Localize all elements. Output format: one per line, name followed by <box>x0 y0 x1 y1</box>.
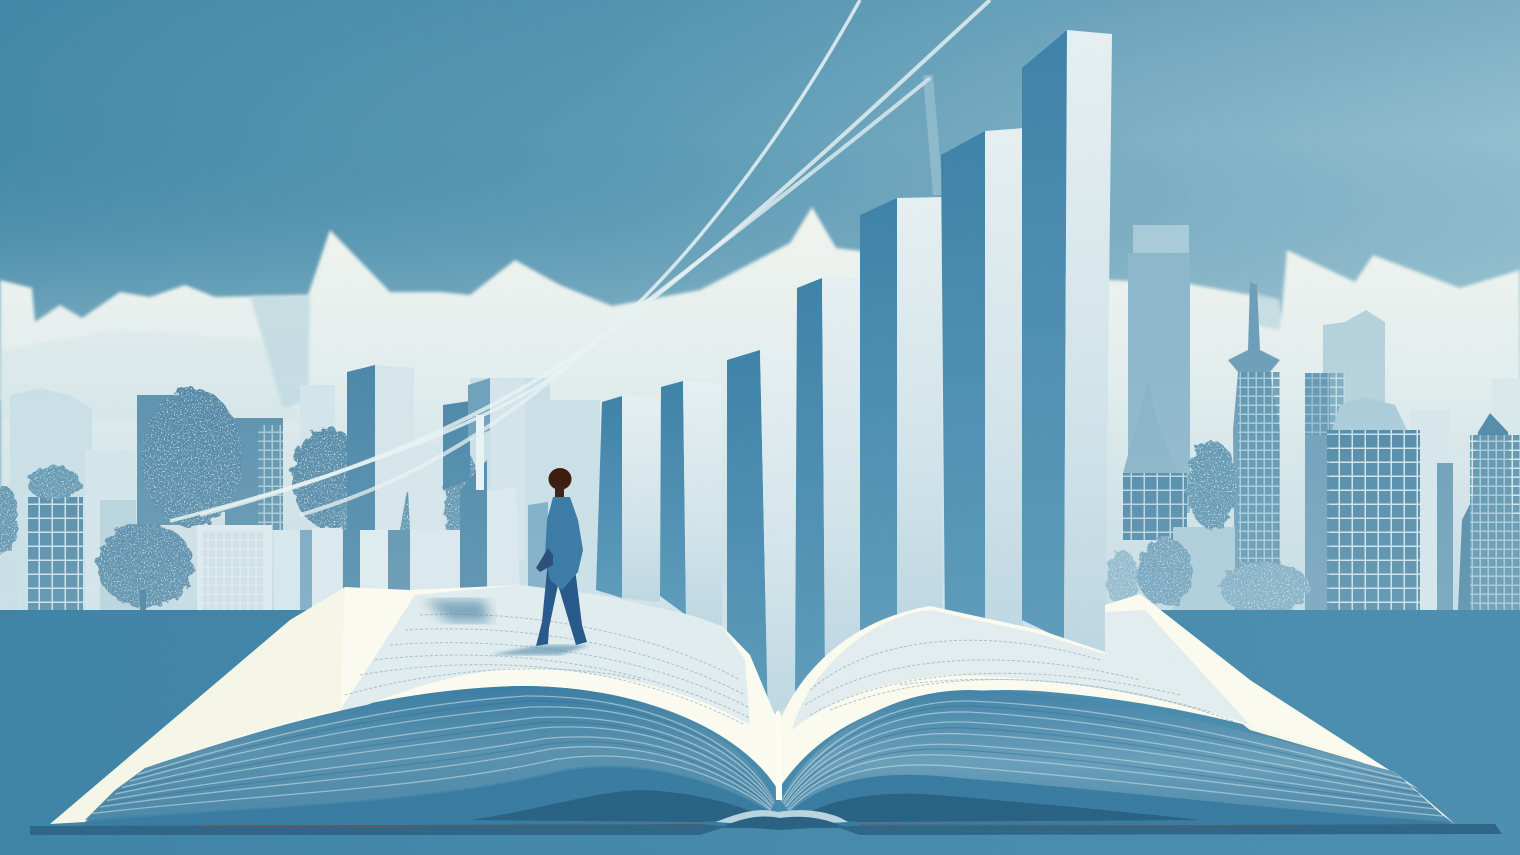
figure: person walking on book <box>490 468 590 655</box>
left cover shadow under block <box>85 768 772 828</box>
left page printed area <box>335 585 750 725</box>
darker striations <box>103 701 1432 808</box>
gutter shadow <box>724 817 842 830</box>
right cream page edge <box>1105 594 1455 824</box>
tree trunk <box>140 590 146 610</box>
haze over skyline <box>0 340 1520 612</box>
page text texture <box>345 614 1235 725</box>
left cream page edge <box>50 587 420 824</box>
pale backdrop behind bar feet <box>596 585 1105 720</box>
domed office building <box>1327 397 1420 610</box>
head <box>548 468 572 490</box>
dark mid buildings <box>0 395 283 610</box>
bar 1 <box>596 396 660 602</box>
mountain silhouette <box>0 207 1520 612</box>
ground band <box>0 610 1520 855</box>
bar base shadow <box>425 600 490 622</box>
spine page curls <box>716 810 848 826</box>
gothic tower <box>1123 380 1187 540</box>
small bar chart blocks <box>347 365 548 606</box>
bar 3 <box>727 350 796 720</box>
bar chart: seven rising columns <box>596 30 1112 720</box>
city: right skyline <box>1106 225 1520 614</box>
open book <box>30 585 1502 835</box>
left page block <box>85 686 775 820</box>
low pale block <box>1173 527 1235 610</box>
bar 7 <box>1022 30 1112 652</box>
foot shadow <box>490 645 590 655</box>
sky background <box>0 0 1520 620</box>
far right towers <box>1437 413 1520 610</box>
trees right <box>1106 441 1310 614</box>
ornate tower <box>1228 282 1290 610</box>
arm <box>536 548 553 572</box>
tall hazy tower <box>1128 225 1190 513</box>
white foreground blocks <box>197 525 460 610</box>
torso coat <box>545 497 583 590</box>
right cover shadow under block <box>788 775 1450 828</box>
legs <box>536 560 587 646</box>
trees left <box>0 388 480 607</box>
white ribbon lines <box>170 0 990 521</box>
cover edge brown line <box>200 825 1300 827</box>
page edge striations <box>92 696 1443 816</box>
right hollow under pages <box>800 794 1200 822</box>
left hollow under pages <box>470 790 768 822</box>
bar 4 <box>795 278 866 700</box>
far pale buildings <box>10 378 600 610</box>
center fold highlight <box>775 710 782 800</box>
mountain shadow facets <box>0 292 1280 420</box>
right page surface <box>778 594 1420 790</box>
bar 6 <box>941 128 1025 640</box>
bar 2 <box>660 381 722 630</box>
right page printed area <box>792 610 1250 730</box>
left page surface <box>145 585 778 790</box>
bar 5 <box>860 197 942 630</box>
neck <box>555 486 564 497</box>
book cover strip <box>30 824 1502 835</box>
city: left skyline <box>0 365 600 610</box>
hazy back towers <box>1305 310 1520 610</box>
right page block <box>780 690 1450 822</box>
